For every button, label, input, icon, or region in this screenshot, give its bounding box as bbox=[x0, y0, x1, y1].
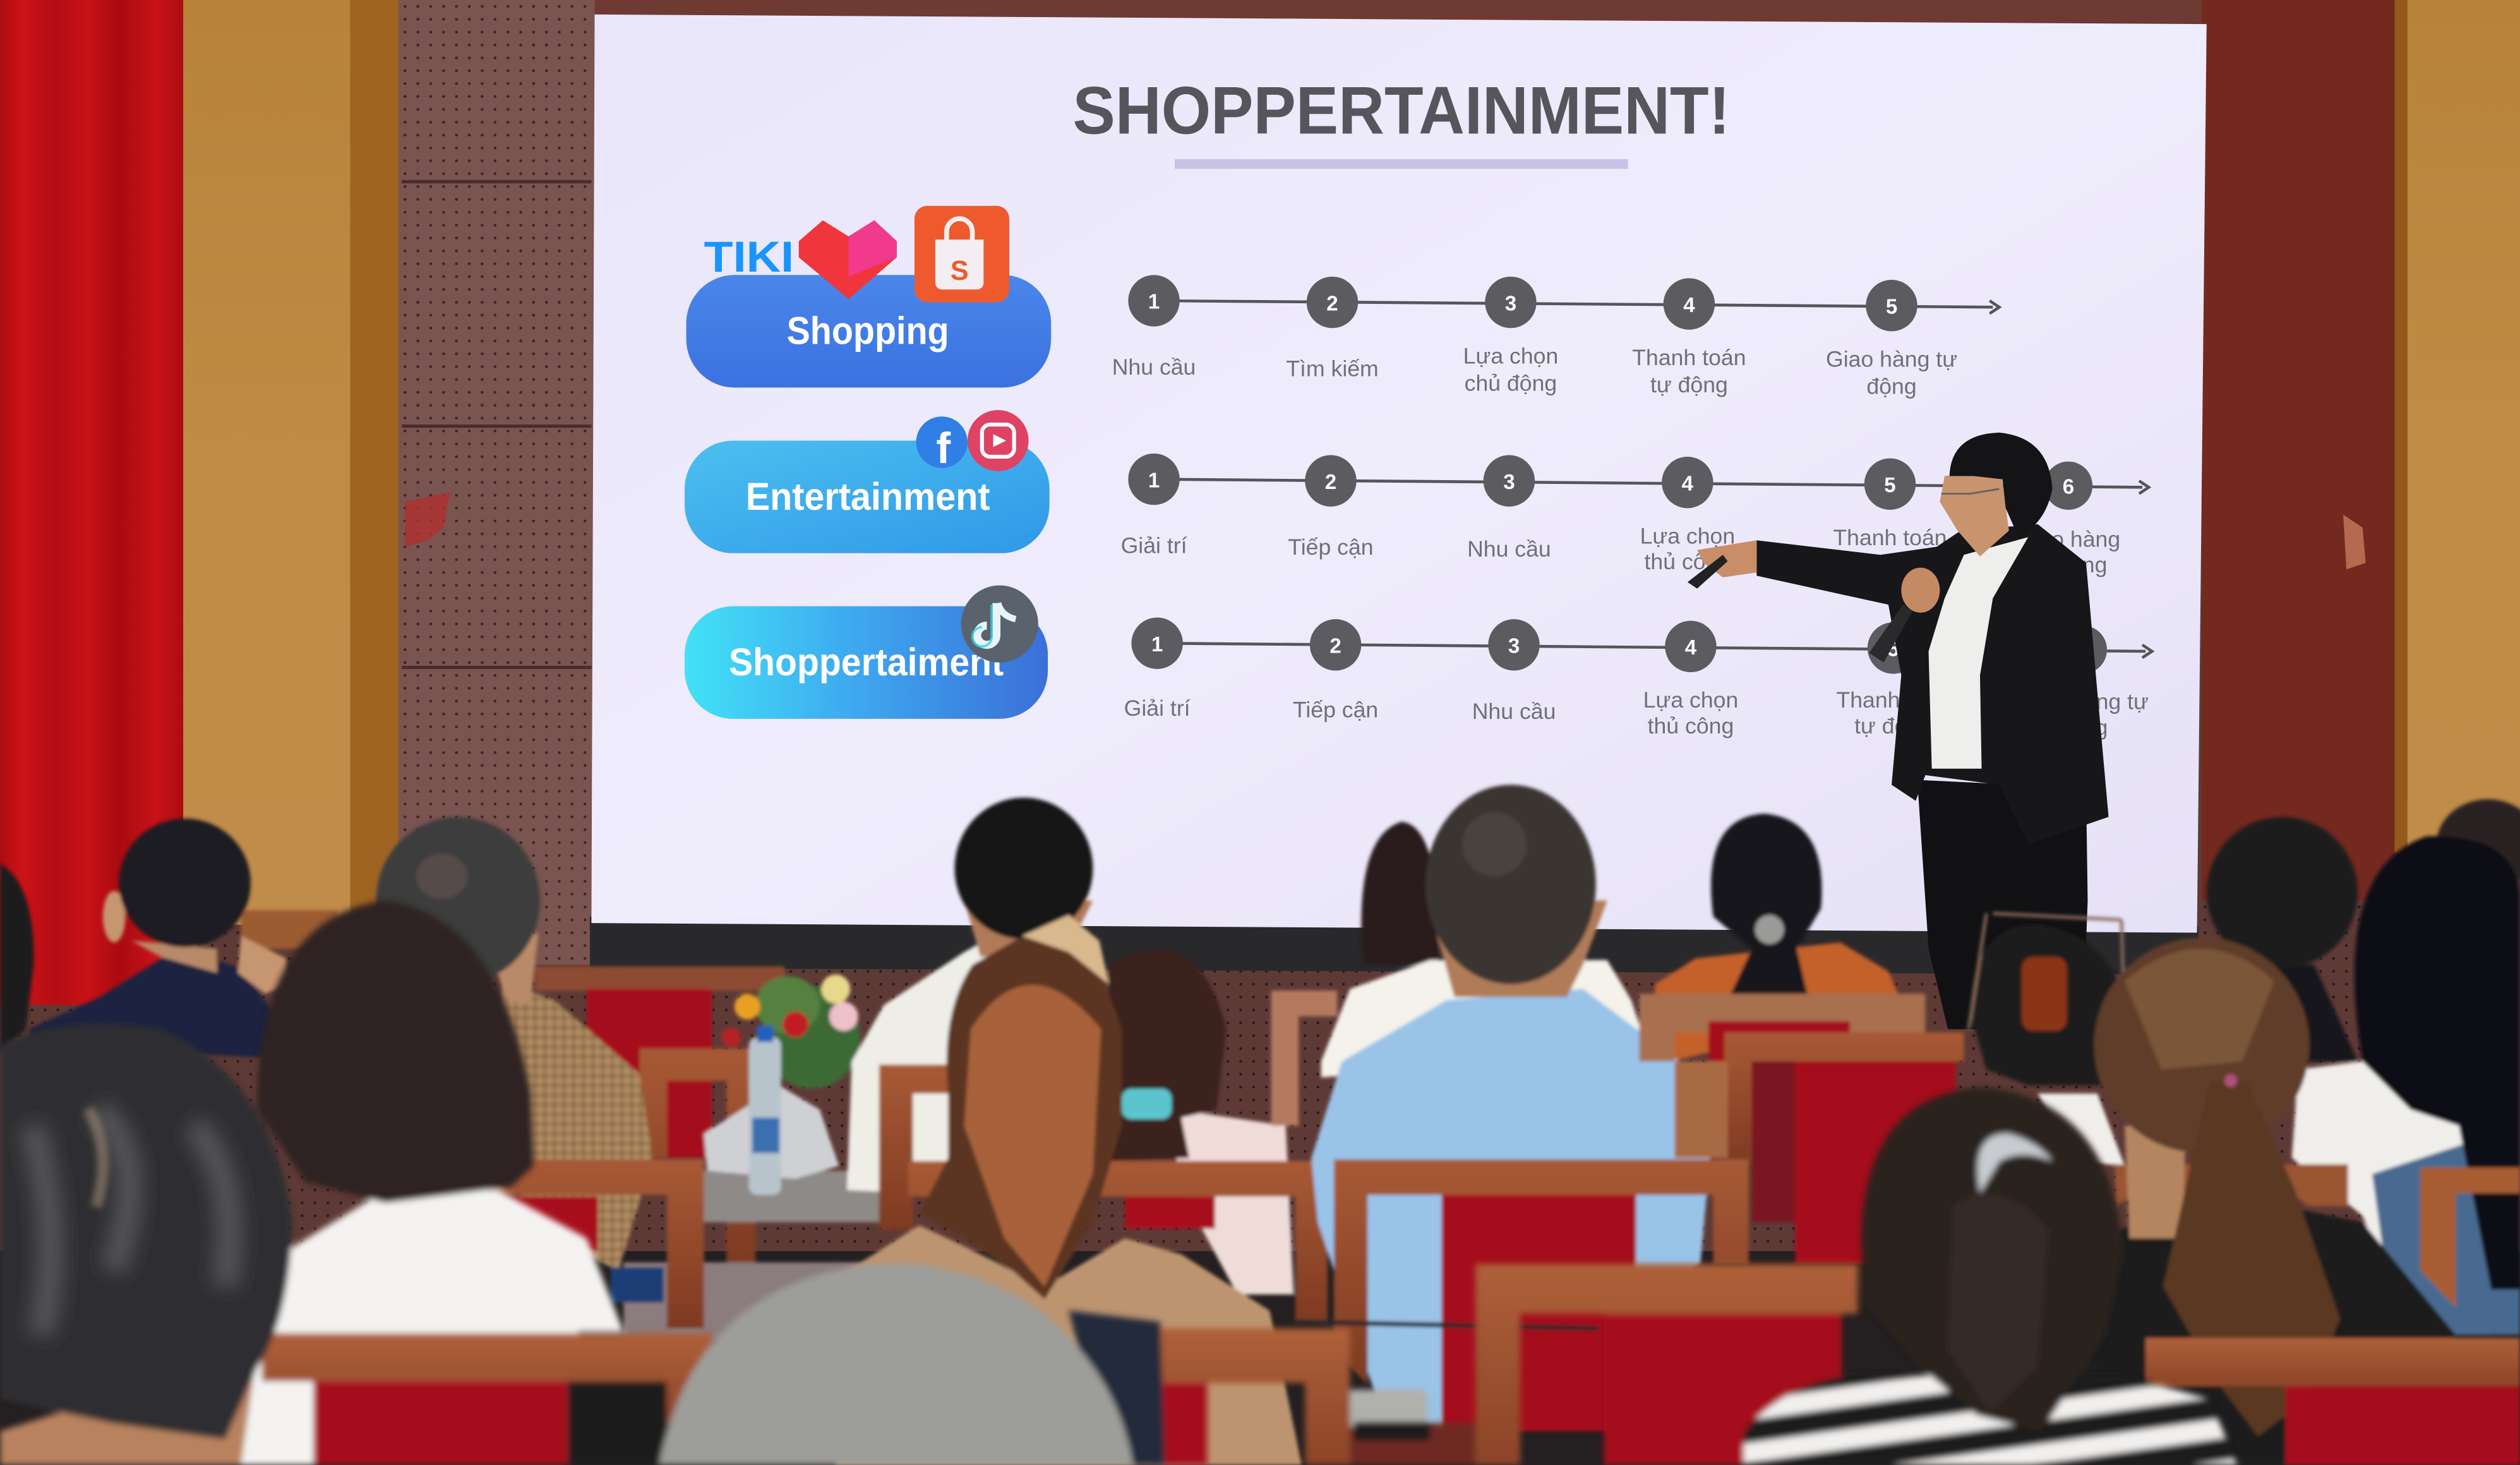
rear chair bbox=[640, 1049, 755, 1262]
timeline: Entertainment bbox=[1121, 454, 2149, 577]
table surface foreground bbox=[1350, 1423, 1495, 1465]
step 3: 3 bbox=[1503, 471, 1515, 494]
step 1: Giải trí bbox=[1124, 696, 1191, 721]
chair upright near flowers bbox=[1271, 991, 1337, 1126]
step 2: 2 bbox=[1325, 471, 1336, 494]
audience: back row and furniture bbox=[0, 785, 2520, 1465]
step 5: 5 bbox=[1887, 638, 1899, 661]
table bbox=[702, 1171, 879, 1222]
girl with long hair behind blue-shirt man bbox=[1361, 822, 1439, 965]
microphone stem bbox=[1293, 1322, 1599, 1329]
step 4: tự động bbox=[1650, 372, 1728, 397]
step 3 bbox=[1467, 455, 1551, 562]
step 2 bbox=[1288, 455, 1374, 560]
step 2: Tiếp cận bbox=[1293, 697, 1378, 722]
shirt bbox=[1929, 537, 2028, 769]
plastic bag bbox=[704, 1085, 839, 1179]
man top right bbox=[2437, 799, 2520, 889]
step 4: Lựa chọn bbox=[1643, 687, 1738, 713]
step 4: 4 bbox=[1683, 294, 1695, 317]
Reels icon bbox=[968, 410, 1029, 471]
woman with bob hair in white top bbox=[233, 901, 623, 1465]
woman with brown ponytail bbox=[823, 915, 1302, 1465]
trousers bbox=[1917, 780, 2087, 1029]
chair beside bob-hair woman bbox=[487, 1159, 704, 1329]
clicker bbox=[1688, 555, 1727, 589]
step 1 bbox=[1121, 454, 1187, 558]
microphone bbox=[1869, 605, 1912, 663]
presenter bbox=[1688, 433, 2109, 1029]
man in white shirt bbox=[847, 798, 1093, 1198]
jacket bbox=[1756, 524, 2109, 844]
dark floor zone bbox=[0, 1251, 2520, 1465]
Facebook icon bbox=[916, 416, 968, 473]
Facebook icon: f bbox=[936, 424, 951, 473]
step 3 bbox=[1472, 619, 1556, 724]
screen bezel bbox=[590, 917, 2199, 975]
step 4: 4 bbox=[1682, 472, 1694, 495]
step 6: Giao hàng tự bbox=[2017, 689, 2149, 714]
Shopee bag logo: S bbox=[951, 256, 969, 286]
woman with ponytail, right bbox=[2089, 937, 2459, 1465]
Tiki logo: TIKI bbox=[704, 232, 794, 281]
step 3: chủ động bbox=[1465, 371, 1557, 396]
step 5: 5 bbox=[1886, 295, 1897, 318]
step 6: 6 bbox=[2077, 639, 2089, 663]
pointing hand bbox=[1697, 540, 1756, 577]
step 1: Nhu cầu bbox=[1112, 354, 1196, 380]
Lazada heart logo bbox=[799, 220, 897, 299]
step 4 bbox=[1643, 621, 1738, 739]
step 5: tự động bbox=[1851, 551, 1929, 576]
step 5 bbox=[1833, 458, 1947, 576]
step 3 bbox=[1463, 277, 1558, 396]
right-side man with dark hair bbox=[2207, 817, 2358, 1061]
upper wall strip bbox=[595, 0, 2207, 23]
glasses bbox=[1941, 489, 2000, 493]
step 3: 3 bbox=[1505, 292, 1516, 315]
step 5: 5 bbox=[1884, 474, 1896, 497]
step 6: 6 bbox=[2063, 475, 2074, 498]
step 1 bbox=[1112, 275, 1196, 380]
girl with black ponytail in orange top bbox=[1650, 814, 1903, 1061]
lower table surface bbox=[623, 1262, 900, 1343]
man in the left foreground bbox=[0, 1024, 292, 1465]
water bottle bbox=[749, 1026, 781, 1195]
step 1: Giải trí bbox=[1121, 533, 1187, 558]
left wood panel bbox=[183, 0, 399, 925]
step 3: Nhu cầu bbox=[1472, 699, 1556, 724]
wooden rail behind seated man bbox=[241, 910, 337, 949]
step 5 bbox=[1826, 280, 1957, 399]
step 5 bbox=[1836, 622, 1950, 739]
step 2: 2 bbox=[1329, 634, 1341, 658]
step 4: thủ công bbox=[1645, 549, 1731, 574]
step 5: Giao hàng tự bbox=[1826, 346, 1957, 371]
chair with red back bbox=[1675, 1032, 1964, 1264]
rear chair rail bbox=[535, 967, 784, 991]
audience: foreground bbox=[0, 901, 2237, 1465]
Shoppertaiment button: Shoppertaiment bbox=[729, 641, 1004, 684]
grey-haired man in plaid shirt bbox=[376, 817, 652, 1270]
front center chair bbox=[1475, 1264, 1858, 1465]
rear chair red seat bbox=[587, 989, 712, 1158]
conference microphone base bbox=[1347, 1389, 1431, 1441]
book on table bbox=[611, 1267, 664, 1303]
step 2: Tìm kiếm bbox=[1286, 356, 1379, 382]
title underline bbox=[1175, 159, 1628, 169]
navy jacket beside grey hair bbox=[1069, 1311, 1165, 1465]
front left chair bbox=[262, 1333, 712, 1465]
step 3: 3 bbox=[1508, 634, 1520, 658]
step 2 bbox=[1286, 277, 1379, 382]
step 4: thủ công bbox=[1648, 713, 1734, 739]
right wood panel bbox=[2395, 0, 2520, 852]
grey-haired person, foreground bbox=[659, 1263, 1133, 1465]
step 4 bbox=[1640, 457, 1735, 574]
face and neck bbox=[1940, 469, 2009, 557]
second girl with clip bbox=[1109, 949, 1293, 1294]
step 2: Tiếp cận bbox=[1288, 534, 1374, 560]
person far left bbox=[0, 864, 34, 1053]
mic hand bbox=[1901, 568, 1940, 613]
rear chair post bbox=[764, 967, 784, 1050]
front centre chair right bbox=[1149, 1329, 1350, 1465]
man in navy jacket bbox=[29, 819, 289, 1058]
rear right chair bbox=[2115, 1164, 2520, 1308]
step 6: tự động bbox=[2030, 552, 2107, 577]
step 5: Thanh toán bbox=[1833, 525, 1947, 550]
hair bbox=[1950, 433, 2053, 537]
timeline: Shoppertaiment bbox=[1124, 617, 2152, 740]
step 4: Lựa chọn bbox=[1640, 523, 1735, 548]
red wood wall, right bbox=[2202, 0, 2395, 901]
woman with glasses on head bbox=[1969, 913, 2127, 1166]
chair behind ponytail girl bbox=[879, 1064, 948, 1230]
red curtain bbox=[0, 0, 183, 1005]
TikTok icon bbox=[961, 586, 1038, 663]
chair with blue-shirt man bbox=[1334, 1159, 1749, 1432]
front right chair bbox=[2145, 1338, 2520, 1465]
perforated acoustic wall, left bbox=[399, 0, 595, 965]
step 4: 4 bbox=[1685, 636, 1697, 660]
step 1: 1 bbox=[1148, 291, 1160, 314]
step 5: tự động bbox=[1854, 713, 1932, 739]
woman in striped shirt bbox=[1744, 1087, 2237, 1465]
step 1: 1 bbox=[1148, 469, 1160, 492]
step 1 bbox=[1124, 617, 1191, 721]
step 5: động bbox=[1866, 374, 1917, 399]
step 2: 2 bbox=[1326, 292, 1338, 315]
step 2 bbox=[1293, 619, 1378, 722]
Shopee bag logo bbox=[915, 206, 1009, 303]
step 6: động bbox=[2058, 714, 2108, 740]
step 4: Thanh toán bbox=[1632, 345, 1746, 370]
title: SHOPPERTAINMENT! bbox=[1073, 72, 1730, 148]
projection slide bbox=[591, 15, 2207, 932]
blue shirt man bbox=[1311, 785, 1710, 1432]
step 3: Lựa chọn bbox=[1463, 343, 1558, 368]
Shopping button bbox=[687, 275, 1051, 387]
Shopping button: Shopping bbox=[787, 310, 949, 353]
woman with long black hair bbox=[2292, 836, 2520, 1335]
step 6: Giao hàng bbox=[2017, 526, 2120, 552]
step 1: 1 bbox=[1151, 633, 1163, 656]
step 4 bbox=[1632, 278, 1746, 397]
Entertainment button: Entertainment bbox=[746, 475, 990, 518]
middle chair bbox=[908, 1161, 1328, 1322]
Entertainment button bbox=[685, 440, 1050, 553]
step 6 bbox=[2017, 462, 2120, 577]
flowers bbox=[722, 975, 860, 1088]
white shirt behind blue-shirt man bbox=[1321, 960, 1649, 1078]
chair behind stage right bbox=[1640, 994, 1925, 1061]
Shoppertaiment button bbox=[685, 606, 1048, 719]
step 5: Thanh toán bbox=[1836, 687, 1950, 713]
step 6 bbox=[2017, 625, 2149, 740]
timeline: Shopping bbox=[1112, 275, 2000, 399]
step 3: Nhu cầu bbox=[1467, 536, 1551, 562]
